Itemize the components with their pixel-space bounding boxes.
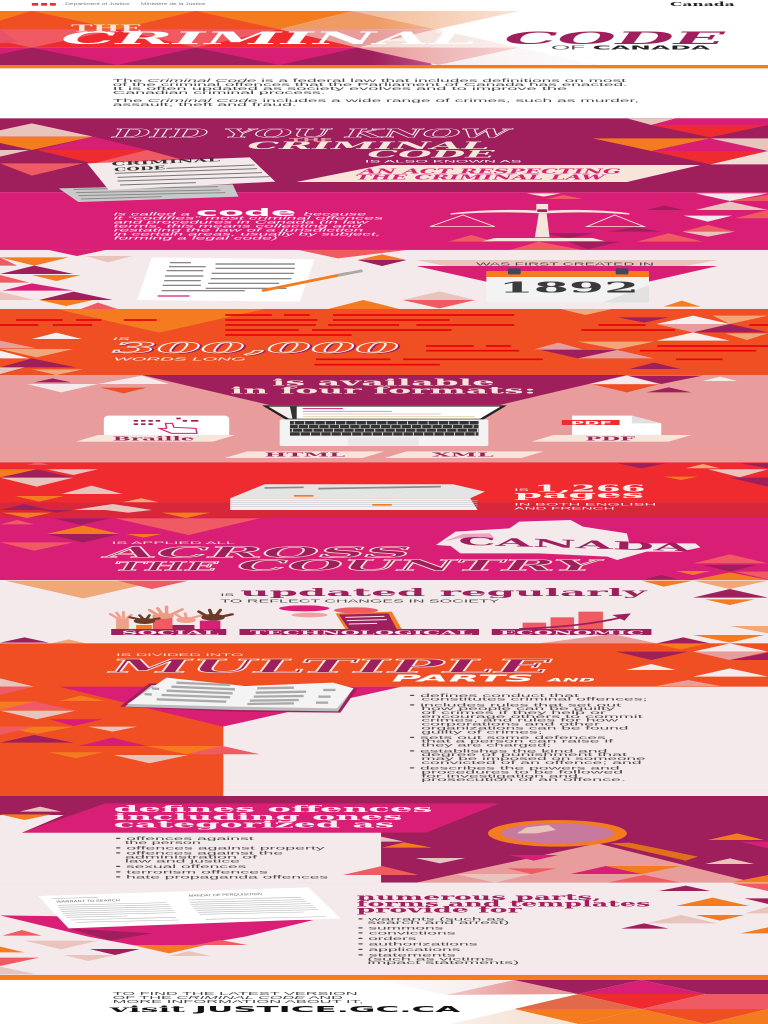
format: Braille: Braille <box>113 436 194 442</box>
multiple parts list: • includes rules that set out <box>409 703 623 708</box>
multiple parts list: procedures to be followed <box>421 770 623 775</box>
panel: 300,000 words long <box>0 309 768 375</box>
icon: bar chart, economic <box>492 612 651 636</box>
map: Canada <box>436 520 700 560</box>
updated regularly heading: TO REFLECT CHANGES IN SOCIETY <box>220 599 501 604</box>
calendar: 1892: 1892 <box>499 280 639 297</box>
icon: document and pencil <box>137 257 362 302</box>
forms list: • convictions <box>358 931 457 936</box>
formats heading <box>142 375 627 405</box>
format: XML: XML <box>432 452 495 458</box>
numerous parts heading: numerous parts, <box>357 893 601 902</box>
icon: scales of justice <box>430 204 644 241</box>
multiple parts heading: AND <box>544 678 596 683</box>
panel: across the country <box>0 518 768 580</box>
multiple parts list: encourage others to commit <box>421 715 644 720</box>
icon: warrant form document <box>38 887 340 928</box>
multiple parts list: organizations can be found <box>421 726 629 731</box>
format: HTML <box>224 451 384 458</box>
offences list: • sexual offences <box>115 865 248 870</box>
multiple parts list: of crimes if they help or <box>421 711 607 716</box>
icon: raised hands, social <box>110 607 232 636</box>
panel: first created <box>0 250 768 309</box>
title: CRIMINAL <box>61 28 478 48</box>
1,266 pages text: IN BOTH ENGLISH <box>514 502 658 507</box>
header triangle band <box>0 11 768 68</box>
multiple parts heading: IS DIVIDED INTO <box>116 653 244 658</box>
multiple parts list: for investigation and <box>421 774 578 779</box>
the criminal code heading: CRIMINAL <box>247 139 490 151</box>
multiple parts list: how people can be guilty <box>421 707 616 712</box>
300,000 text: 300,000 <box>113 340 400 357</box>
title: THE <box>71 23 143 34</box>
footer call to action <box>107 992 461 1014</box>
code paragraph: code <box>196 206 296 219</box>
forms list: impact statements) <box>367 961 520 966</box>
multiple parts list: • establishes the kind and <box>409 749 608 754</box>
icon: warrant form document: MANDAT DE PERQUISITION <box>188 893 262 897</box>
offences list: • offences against <box>115 837 256 842</box>
panel: four formats <box>0 375 768 462</box>
defines offences heading: categorized as <box>114 819 394 830</box>
act banner <box>296 165 700 182</box>
footer call to action: OF THE CRIMINAL CODE AND <box>113 996 344 1001</box>
multiple parts list <box>409 694 648 783</box>
defines offences heading <box>22 803 500 833</box>
300,000 text: IS <box>113 337 132 342</box>
forms list: • orders <box>358 937 418 942</box>
intro text: of the criminal offences that the Parliament of Canada has enacted. <box>113 83 628 88</box>
footer <box>0 975 768 1024</box>
title: CODE <box>504 28 728 48</box>
multiple parts heading <box>107 653 596 684</box>
1,266 pages text: pages <box>514 489 645 500</box>
offences list: • terrorism offences <box>115 870 269 875</box>
icon: code documents <box>59 157 275 202</box>
act banner: THE CRIMINAL LAW <box>355 173 609 181</box>
icon: laptop <box>262 405 507 446</box>
1,266 pages text: 1,266 <box>534 483 646 494</box>
icon: code documents: CRIMINAL <box>111 157 222 167</box>
code paragraph: and procedures in Canada (in law <box>114 220 372 225</box>
government signature: Ministère de la Justice <box>141 2 206 6</box>
format: HTML: HTML <box>264 452 346 458</box>
forms list: search and arrest) <box>367 921 510 926</box>
panel: 1,266 pages <box>0 462 768 517</box>
forms list: • applications <box>358 948 462 953</box>
defines offences heading: defines offences <box>114 803 432 814</box>
defines offences heading: including ones <box>114 811 403 822</box>
across the country text: ACROSS <box>100 543 412 561</box>
intro text: It is often updated as society evolves and to improve the <box>113 87 568 92</box>
section group: offences, forms, footer <box>0 790 768 1024</box>
offences list: administration of <box>125 855 259 860</box>
updated regularly heading: updated regularly <box>240 586 650 599</box>
offences list: • offences against property <box>115 846 326 851</box>
footer call to action: MORE INFORMATION ABOUT IT, <box>113 1000 363 1005</box>
1,266 pages text: IS <box>514 488 530 492</box>
icon: bar chart, economic: ECONOMIC <box>500 629 645 636</box>
icon: phone and chat, technological <box>240 605 479 636</box>
the criminal code heading: CODE <box>367 148 497 161</box>
offences list: • offences against the <box>115 851 283 856</box>
300,000 text: WORDS LONG <box>114 357 246 362</box>
panel: numerous parts and forms <box>0 883 768 975</box>
multiple parts list: constitutes criminal offences; <box>421 697 648 702</box>
icon: phone and chat, technological: TECHNOLOGICAL <box>250 629 473 636</box>
top strip of pages panel <box>0 510 768 518</box>
code paragraph: is called a <box>114 212 190 217</box>
footer call to action: JUSTICE.GC.CA <box>192 1006 461 1014</box>
offences list <box>115 837 329 880</box>
panel: is called a code <box>0 192 768 250</box>
section group: first created, words, formats, pages <box>0 250 768 517</box>
forms list: • statements <box>358 953 457 958</box>
icon: raised hands, social: SOCIAL <box>121 629 219 636</box>
across the country text: THE <box>114 559 218 574</box>
multiple parts list: they are charged; <box>421 743 551 748</box>
offences list: • hate propaganda offences <box>115 875 329 880</box>
multiple parts list: • sets out some defences <box>409 736 607 741</box>
map: Canada: CANADA <box>458 535 692 554</box>
did you know heading: DID YOU KNOW <box>110 125 514 141</box>
act banner: AN ACT RESPECTING <box>357 167 621 175</box>
updated regularly heading: IS <box>220 593 234 597</box>
multiple parts list: • defines conduct that <box>409 694 581 699</box>
intro text <box>113 79 639 108</box>
title: OF <box>551 45 585 51</box>
intro text: assault, theft and fraud. <box>113 103 297 108</box>
title <box>61 23 728 51</box>
format: PDF <box>531 416 692 442</box>
multiple parts list: corporations and other <box>421 722 601 727</box>
multiple parts list: prosecution of an offence. <box>421 778 626 783</box>
code paragraph: forming a legal code) <box>114 236 278 241</box>
multiple parts heading: MULTIPLE <box>107 656 552 677</box>
panel: defines offences <box>0 790 768 883</box>
panel: did you know <box>0 118 768 192</box>
multiple parts list: that a person can raise if <box>421 739 615 744</box>
code paragraph: terms, this means collecting and <box>114 224 365 229</box>
numerous parts heading: forms and templates <box>357 899 651 909</box>
across the country text: IS APPLIED ALL <box>112 541 236 546</box>
government signature <box>32 2 206 6</box>
footer call to action: visit <box>107 1006 186 1014</box>
300,000 text: 300,000 <box>114 341 401 357</box>
government signature: Department of Justice <box>65 2 130 6</box>
panel: multiple parts <box>0 643 768 790</box>
across the country text: COUNTRY <box>238 556 606 575</box>
title: CANADA <box>593 44 712 51</box>
intro text: The Criminal Code includes a wide range of crimes, such as murder, <box>113 99 639 104</box>
code paragraph: restating the law of a jurisdiction <box>114 228 363 233</box>
format: PDF: PDF <box>571 421 613 426</box>
forms list: • warrants (such as <box>358 917 506 922</box>
intro text: Canadian criminal process. <box>113 91 326 96</box>
the criminal code heading: IS ALSO KNOWN AS <box>365 159 522 163</box>
Canada wordmark: Canada <box>670 0 736 8</box>
section group: across the country, updated, multiple parts <box>0 510 768 790</box>
forms list: • summons <box>358 926 445 931</box>
code paragraph <box>114 206 384 241</box>
multiple parts list: may be imposed on someone <box>421 757 646 762</box>
forms list: (such as victims <box>367 957 495 962</box>
1,266 pages text: AND FRENCH <box>514 506 616 511</box>
intro text: The Criminal Code is a federal law that includes definitions on most <box>113 79 628 84</box>
multiple parts list: degree of punishment that <box>421 753 629 758</box>
icon: stack of pages <box>230 484 485 510</box>
code paragraph: in certain areas, usually by subject, <box>114 232 381 237</box>
format: XML <box>384 451 544 458</box>
300,000 text <box>113 337 401 362</box>
first created banner <box>416 260 718 300</box>
code paragraph: it “codifies” most criminal offences <box>114 216 384 221</box>
multiple parts list: convicted of an offence; and <box>421 761 642 766</box>
1,266 pages text <box>514 483 658 511</box>
first created banner: WAS FIRST CREATED IN <box>476 262 655 267</box>
offences list: law and justice <box>125 859 240 864</box>
code paragraph: because <box>304 212 366 217</box>
the criminal code heading: THE <box>289 138 335 143</box>
top of light band <box>0 250 768 260</box>
numerous parts heading <box>357 893 651 915</box>
format: PDF: PDF <box>585 436 636 442</box>
multiple parts list: • describes the powers and <box>409 766 620 771</box>
formats heading: in four formats: <box>230 385 536 396</box>
forms list: • authorizations <box>358 942 479 947</box>
multiple parts list: guilty of crimes; <box>421 730 543 735</box>
panel: updated regularly <box>0 572 768 643</box>
multiple parts heading: PARTS <box>392 673 534 684</box>
updated regularly heading <box>220 586 650 604</box>
calendar: 1892 <box>486 268 649 302</box>
section group: header, intro, did you know, code <box>0 0 768 260</box>
the criminal code heading <box>247 138 522 163</box>
icon: code documents: CODE <box>114 165 166 173</box>
icon: magnifying glass <box>488 820 698 861</box>
icon: warrant form document: WARRANT TO SEARCH <box>56 899 120 903</box>
forms list <box>358 917 520 966</box>
format: Braille <box>76 416 235 442</box>
multiple parts list: crimes, and rules for how <box>421 718 619 723</box>
footer call to action: TO FIND THE LATEST VERSION <box>113 992 358 997</box>
icon: open book <box>120 678 358 713</box>
numerous parts heading: provide for <box>357 905 523 915</box>
formats heading: is available <box>272 377 495 388</box>
across the country text <box>100 541 606 575</box>
offences list: the person <box>125 841 201 846</box>
